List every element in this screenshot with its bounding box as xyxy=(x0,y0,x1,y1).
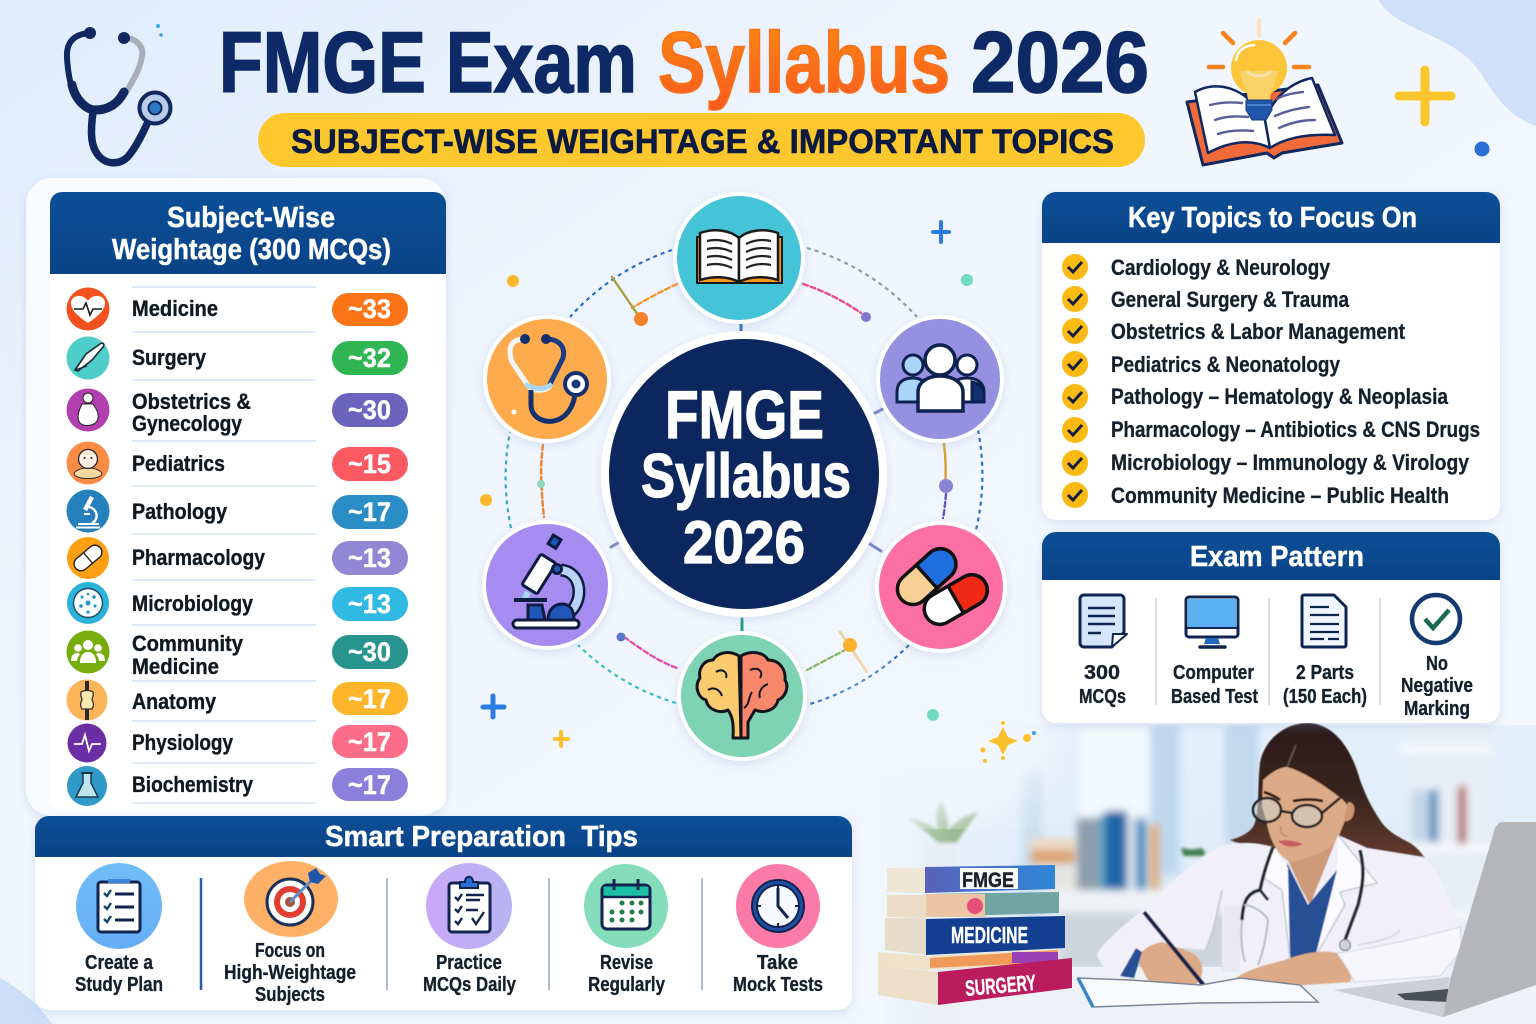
tip: study plan: Create a xyxy=(85,952,154,974)
item: 300 MCQs xyxy=(1079,595,1127,708)
icon: capsule xyxy=(67,537,109,579)
row: Pediatrics: Pediatrics xyxy=(132,451,225,476)
item: 300 MCQs: 300 xyxy=(1084,662,1120,684)
tip: calendar xyxy=(584,864,668,996)
item: no negative marking: Negative xyxy=(1401,675,1473,697)
center circle: 2026 xyxy=(683,509,805,576)
panel header: Key Topics to Focus On xyxy=(1128,202,1417,234)
panel header: Smart Preparation Tips xyxy=(325,821,638,853)
topic list: Cardiology & Neurology xyxy=(1111,255,1331,280)
central hub diagram xyxy=(480,192,1007,761)
weightage pill: ~17 xyxy=(348,497,391,527)
icon: petri dish xyxy=(67,582,109,624)
row: Pathology xyxy=(66,490,408,532)
tip: target: Subjects xyxy=(255,984,325,1006)
label: Community xyxy=(132,631,244,656)
weightage pill xyxy=(332,541,408,575)
panel header xyxy=(1042,532,1500,580)
coat xyxy=(1097,835,1462,982)
weightage pill xyxy=(332,635,408,669)
panel: exam pattern xyxy=(1042,532,1500,723)
face xyxy=(1262,767,1350,862)
weightage pill xyxy=(332,587,408,621)
writing hand xyxy=(1136,942,1202,988)
soft window glow xyxy=(835,675,1055,815)
hair xyxy=(1230,723,1430,868)
label: Medicine xyxy=(132,654,219,679)
title xyxy=(219,15,1149,111)
topic list xyxy=(1062,254,1480,508)
weightage pill xyxy=(332,495,408,529)
icon: mother xyxy=(66,388,110,432)
tip: calendar: Regularly xyxy=(588,974,666,996)
item: no negative marking xyxy=(1401,595,1473,720)
label xyxy=(132,389,251,436)
item: no negative marking: Marking xyxy=(1404,698,1470,720)
coat lapels xyxy=(1262,847,1290,958)
subtitle banner xyxy=(258,113,1145,167)
dashed orbit ring xyxy=(506,248,982,704)
item: 2 parts xyxy=(1283,595,1367,708)
row: Surgery: Surgery xyxy=(132,345,207,370)
node: people xyxy=(876,315,1004,443)
stethoscope xyxy=(1242,847,1363,940)
item: computer based test: Computer xyxy=(1173,662,1254,684)
tip: clipboard: MCQs Daily xyxy=(423,974,517,996)
title: Syllabus xyxy=(658,15,950,111)
room background xyxy=(909,725,1536,972)
glasses xyxy=(1253,798,1281,822)
topic list: Community Medicine – Public Health xyxy=(1111,483,1449,508)
row: Medicine xyxy=(66,288,408,330)
tip: clipboard: Practice xyxy=(436,952,502,974)
center circle: Syllabus xyxy=(641,442,851,511)
row: Physiology xyxy=(68,724,408,762)
node: open book xyxy=(673,192,805,324)
stack of books: FMGE xyxy=(962,869,1014,892)
row: Anatomy: Anatomy xyxy=(132,689,217,714)
row: Surgery xyxy=(66,336,408,380)
stack of books: MEDICINE xyxy=(951,922,1028,948)
tip: calendar: Revise xyxy=(600,952,653,974)
row: Pharmacology xyxy=(67,537,408,579)
label: Obstetrics & xyxy=(132,389,251,414)
topic list: Pathology – Hematology & Neoplasia xyxy=(1111,384,1449,409)
weightage pill xyxy=(332,768,408,801)
weightage pill xyxy=(332,393,408,427)
panel header: Subject-Wise xyxy=(167,202,335,234)
tip: clock: Mock Tests xyxy=(733,974,823,996)
panel: key topics xyxy=(1042,192,1500,520)
panel header xyxy=(50,192,446,274)
topic list: Microbiology – Immunology & Virology xyxy=(1111,450,1470,475)
node: capsules xyxy=(875,521,1007,653)
weightage pill xyxy=(332,725,408,758)
item: 2 parts: (150 Each) xyxy=(1283,686,1367,708)
center circle: FMGE xyxy=(665,377,824,453)
doctor study photo xyxy=(835,675,1536,1024)
title: 2026 xyxy=(971,15,1149,111)
weightage pill: ~13 xyxy=(348,543,391,573)
scrub top xyxy=(1287,863,1337,958)
decoration: yellow plus and blue dot xyxy=(1399,70,1490,156)
icon: microscope xyxy=(66,490,110,532)
weightage pill xyxy=(332,293,408,326)
node: microscope xyxy=(482,520,612,650)
weightage pill: ~32 xyxy=(348,343,391,373)
pen xyxy=(1144,912,1206,988)
icon: stethoscope top left xyxy=(67,24,170,163)
stack of books xyxy=(878,865,1072,1005)
row: Anatomy xyxy=(66,680,408,720)
icon: heart xyxy=(66,288,110,330)
topic list: Pharmacology – Antibiotics & CNS Drugs xyxy=(1111,417,1480,442)
weightage pill xyxy=(332,341,408,375)
icon: open book with light bulb xyxy=(1187,21,1342,165)
panel header: Exam Pattern xyxy=(1190,541,1364,573)
row: Medicine: Medicine xyxy=(132,296,218,321)
row: Community Medicine xyxy=(66,630,408,679)
panel header: Weightage (300 MCQs) xyxy=(112,234,391,266)
label: Gynecology xyxy=(132,411,243,436)
tip: study plan xyxy=(75,863,163,996)
weightage pill xyxy=(332,447,408,481)
row: Pharmacology: Pharmacology xyxy=(132,545,266,570)
tip: target: Focus on xyxy=(255,940,325,962)
weightage pill: ~17 xyxy=(348,770,391,800)
panel header xyxy=(35,816,852,857)
icon: joint bone xyxy=(66,680,108,720)
neck xyxy=(1288,840,1340,908)
topic list: General Surgery & Trauma xyxy=(1111,287,1350,312)
tip: study plan: Study Plan xyxy=(75,974,163,996)
decorative plus marks and dots xyxy=(480,222,973,746)
icon: flask xyxy=(67,766,107,806)
panel: subject-wise weightage xyxy=(26,178,446,816)
icon: people xyxy=(66,630,110,674)
label xyxy=(132,631,244,679)
item: computer based test xyxy=(1171,597,1258,708)
tip: clock xyxy=(733,864,823,996)
row: Obstetrics & Gynecology xyxy=(66,388,408,436)
topic list: Pediatrics & Neonatology xyxy=(1111,352,1341,377)
laptop xyxy=(1333,822,1536,1017)
tip: target: High-Weightage xyxy=(224,962,356,984)
row: Pediatrics xyxy=(66,442,408,484)
title: FMGE Exam xyxy=(219,15,637,111)
item: computer based test: Based Test xyxy=(1171,686,1258,708)
tip: clock: Take xyxy=(757,952,798,974)
desk xyxy=(870,967,1536,1024)
notebook xyxy=(1078,978,1318,1007)
weightage pill: ~30 xyxy=(348,637,391,667)
panel: smart preparation tips xyxy=(35,816,852,1010)
tip: target xyxy=(224,861,356,1006)
item: 300 MCQs: MCQs xyxy=(1079,686,1126,708)
tip: clipboard xyxy=(423,863,517,996)
inner connector arcs xyxy=(541,277,946,672)
topic list: Obstetrics & Labor Management xyxy=(1111,319,1406,344)
weightage pill: ~17 xyxy=(348,684,391,714)
center circle xyxy=(601,331,887,617)
panel header xyxy=(1042,192,1500,243)
weightage pill: ~30 xyxy=(348,395,391,425)
resting hand and sleeve xyxy=(1233,952,1354,988)
row: Pathology: Pathology xyxy=(132,499,228,524)
item: no negative marking: No xyxy=(1426,653,1448,675)
weightage pill: ~17 xyxy=(348,727,391,757)
doctor xyxy=(1097,723,1462,988)
node: brain xyxy=(677,631,807,761)
icon: baby xyxy=(66,442,110,484)
icon: pulse xyxy=(68,724,106,762)
weightage pill: ~15 xyxy=(348,449,391,479)
decorative gold sparkles and teal dot xyxy=(927,709,1036,763)
row: Biochemistry xyxy=(67,766,408,806)
weightage pill: ~33 xyxy=(348,294,391,324)
stack of books: SURGERY xyxy=(964,970,1037,1001)
item: 2 parts: 2 Parts xyxy=(1296,662,1354,684)
subtitle banner: SUBJECT-WISE WEIGHTAGE & IMPORTANT TOPICS xyxy=(291,123,1114,161)
row: Microbiology: Microbiology xyxy=(132,591,254,616)
row: Biochemistry: Biochemistry xyxy=(132,772,254,797)
node: stethoscope xyxy=(483,315,611,443)
row: Physiology: Physiology xyxy=(132,730,234,755)
weightage pill xyxy=(332,682,408,715)
row: Microbiology xyxy=(67,582,408,624)
weightage pill: ~13 xyxy=(348,589,391,619)
icon: scalpel xyxy=(66,336,110,380)
